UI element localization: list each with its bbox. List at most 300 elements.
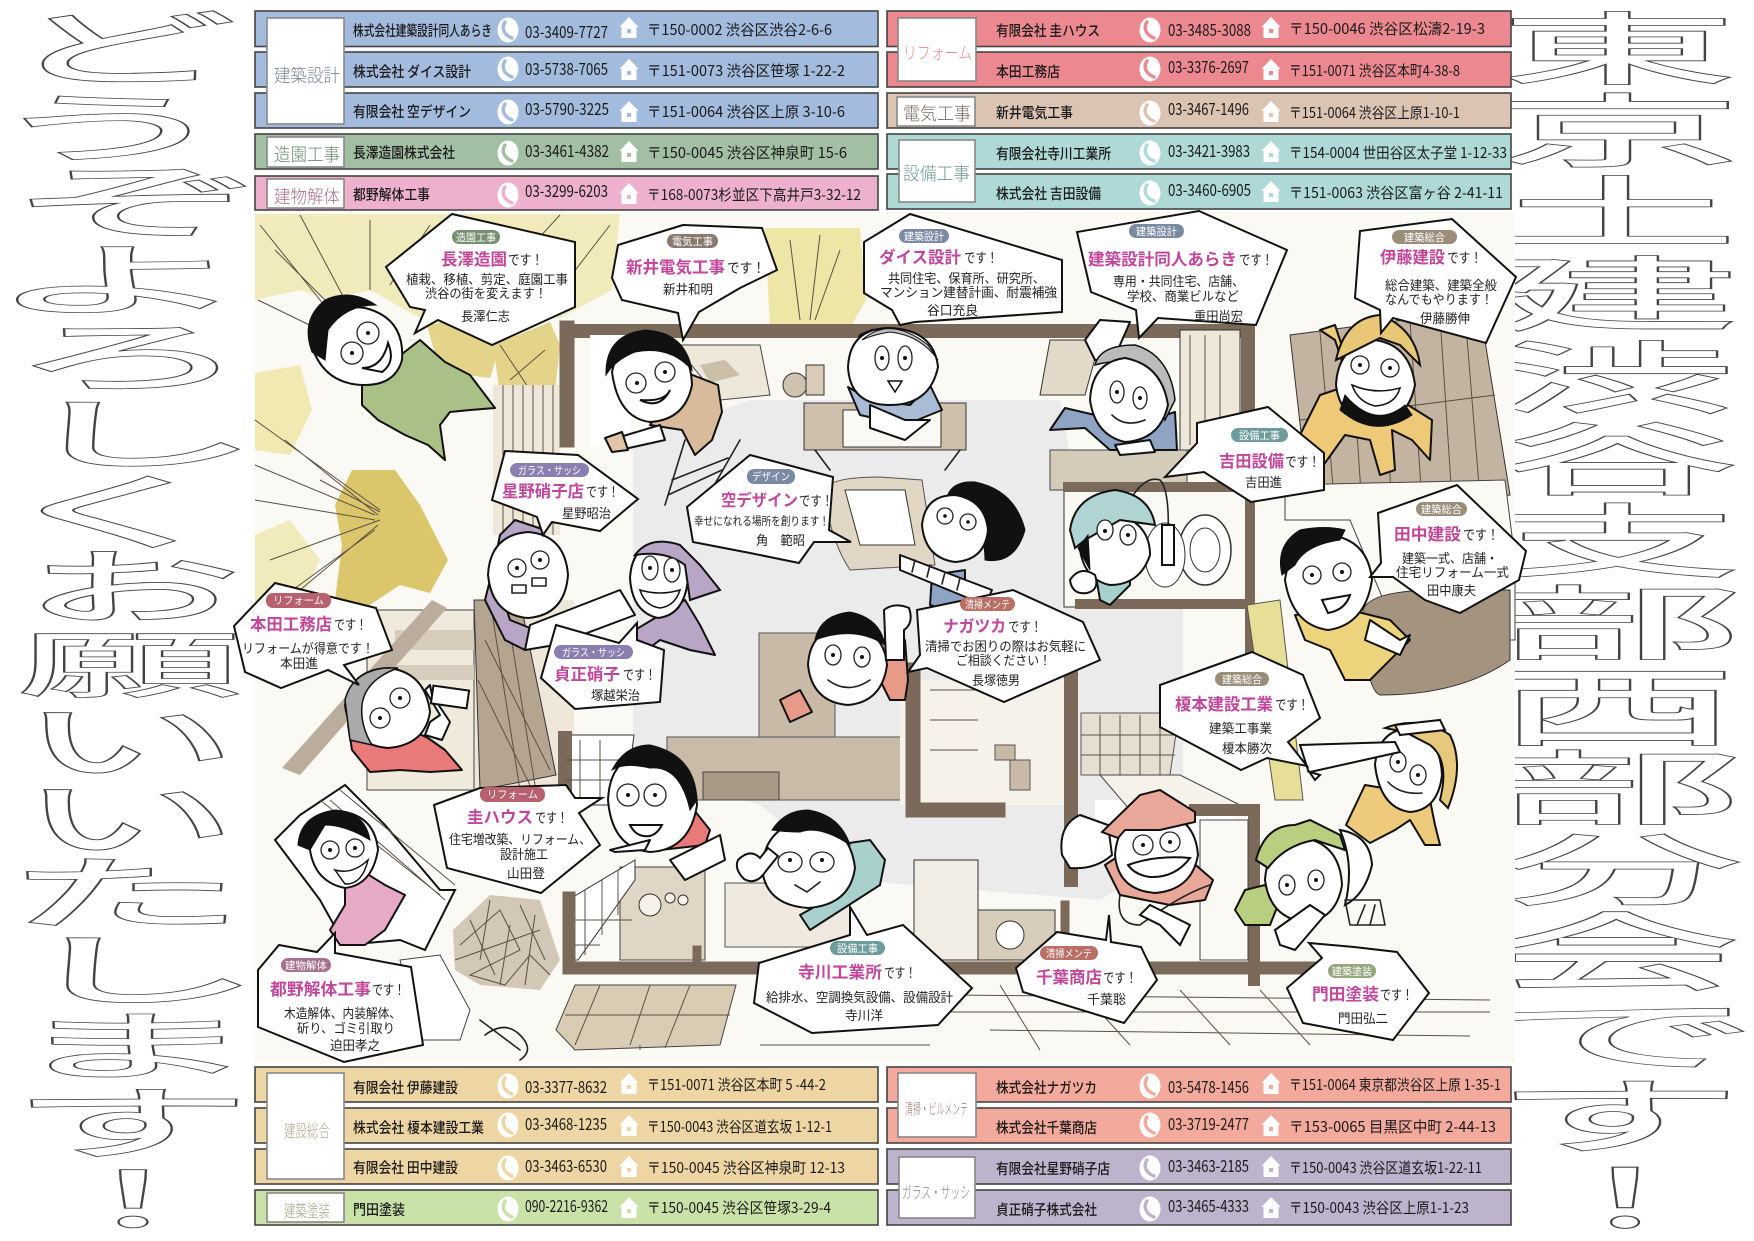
bubble text: 長澤仁志 (461, 306, 510, 325)
bubble text: マンション建替計画、耐震補強 (880, 282, 1057, 301)
row: 貞正硝子 (887, 1190, 1511, 1225)
bubble text: 榎本勝次 (1222, 738, 1272, 757)
bubble text: 伊藤勝伸 (1420, 308, 1470, 327)
heading: right vertical title: 谷 (1496, 396, 1740, 512)
bubble title: です！ (1275, 695, 1309, 715)
category box: 建物解体: 建物解体 (274, 183, 340, 209)
icon: phone (498, 1156, 518, 1180)
row: 空デザイン (255, 93, 878, 128)
character: 田中 (建設) (1280, 528, 1410, 680)
heading: left vertical message: く (0, 448, 240, 565)
icon: phone (498, 1074, 518, 1098)
company name: 株式会社千葉商店 (996, 1117, 1097, 1138)
tag: 造園工事: 造園工事 (456, 230, 496, 245)
icon: phone (1140, 56, 1160, 82)
icon: house (620, 1197, 638, 1218)
heading: left vertical message: お (23, 523, 243, 640)
speech bubble: 田中建設 (1370, 485, 1526, 613)
phone number: 03-3461-4382 (525, 138, 609, 162)
row: ナガツカ (887, 1067, 1511, 1102)
bubble title: です！ (1463, 525, 1499, 545)
phone number: 03-3467-1496 (1168, 96, 1249, 120)
bubble text (1113, 271, 1244, 325)
category box: ガラス・サッシ: ガラス・サッシ (902, 1179, 970, 1203)
icon: phone (1140, 1112, 1160, 1138)
heading: left vertical message: た (4, 831, 246, 945)
bubble title (1312, 981, 1413, 1005)
category box: 建築塗装: 建築塗装 (284, 1197, 330, 1222)
bubble text: 田中康夫 (1427, 580, 1476, 599)
heading: right vertical title: 部 (1493, 724, 1743, 841)
icon: house (620, 183, 638, 204)
bubble text: 門田弘二 (1338, 1008, 1388, 1027)
company name: 株式会社 ダイス設計 (353, 61, 471, 82)
icon: house (1262, 181, 1280, 202)
bubble text: 長塚徳男 (972, 670, 1020, 689)
bubble title: 貞正硝子 (554, 661, 620, 685)
character: 榎本 (建設工業) (1300, 720, 1457, 845)
category box: ガラス・サッシ (899, 1157, 975, 1218)
company name: 有限会社 伊藤建設 (353, 1077, 458, 1098)
company name: 貞正硝子株式会社 (996, 1199, 1097, 1220)
phone number: 03-3460-6905 (1168, 177, 1251, 201)
icon: phone (498, 1196, 518, 1222)
character: 吉田 (設備) (1070, 479, 1174, 605)
bubble text (1396, 548, 1509, 599)
bubble text: 山田登 (507, 863, 545, 882)
category box: 設備工事: 設備工事 (903, 160, 970, 186)
bubble text (284, 1003, 401, 1054)
heading: left vertical message: 願 (17, 608, 243, 712)
tag: リフォーム: リフォーム (487, 787, 538, 802)
address: 〒151-0064 渋谷区上原1-10-1 (1289, 102, 1460, 123)
speech bubble: 門田塗装 (1287, 943, 1429, 1040)
bubble text: なんでもやります！ (1385, 289, 1493, 308)
bubble text: 建築一式、店舗・ (1402, 548, 1498, 567)
bubble title: です！ (1447, 248, 1482, 268)
bubble text: 吉田進 (1245, 472, 1282, 491)
icon: house (620, 59, 638, 80)
company name: 有限会社 空デザイン (353, 101, 471, 122)
character: 寺川 (工業所) (737, 810, 885, 930)
bubble title: です！ (884, 963, 916, 983)
tag: 建築総合: 建築総合 (1222, 672, 1262, 687)
bubble title (467, 804, 568, 828)
bubble title: です！ (964, 248, 998, 268)
row: 千葉商店 (887, 1108, 1511, 1143)
phone number: 03-5478-1456 (1168, 1074, 1249, 1098)
bubble title: です！ (334, 615, 367, 635)
phone number: 03-3376-2697 (1168, 54, 1249, 78)
bubble title (554, 661, 656, 685)
phone number: 03-3485-3088 (1168, 17, 1251, 41)
character: 門田 (塗装) (1235, 820, 1385, 950)
phone number: 03-3719-2477 (1168, 1111, 1249, 1135)
bubble title: です！ (1380, 985, 1413, 1005)
icon: phone (498, 140, 518, 166)
speech bubble: 新井電気工事 (612, 225, 777, 340)
speech bubble: ナガツカ (908, 590, 1100, 702)
bubble text: 寺川洋 (845, 1005, 883, 1024)
bubble title: です！ (1008, 617, 1042, 637)
heading: left vertical message: い (19, 751, 237, 873)
tag: ガラス・サッシ: ガラス・サッシ (518, 463, 581, 478)
category box: 建築設計 (267, 18, 344, 124)
tag: 清掃メンテ: 清掃メンテ (1046, 946, 1092, 961)
phone number: 03-3421-3983 (1168, 138, 1250, 162)
bubble text (406, 269, 568, 325)
bubble text: 共同住宅、保育所、研究所、 (888, 268, 1045, 287)
bubble text: 星野昭治 (562, 503, 611, 522)
category box: 建築設計: 建築設計 (274, 62, 340, 88)
company name: 門田塗装 (353, 1199, 405, 1220)
bubble text: 渋谷の街を変えます！ (425, 283, 547, 302)
row: 榎本建設工業 (255, 1108, 878, 1143)
icon: phone (1140, 1196, 1160, 1222)
heading: right vertical title: す (1492, 1052, 1744, 1169)
company name: 長澤造園株式会社 (353, 142, 455, 163)
bubble text: 新井和明 (663, 279, 713, 298)
speech bubble: 長澤造園 (386, 214, 575, 345)
character: 千葉 (清掃) (1061, 790, 1213, 945)
icon: house (620, 1073, 638, 1094)
heading: left vertical message: し (9, 910, 265, 1021)
row: 本田工務店 (887, 52, 1511, 87)
character: 本田 (工務店) (345, 668, 469, 772)
address: 〒154-0004 世田谷区太子堂 1-12-33 (1289, 142, 1507, 163)
row: 建築設計同人あらき (255, 11, 878, 46)
speech bubble: ダイス設計 (864, 214, 1062, 325)
character: 重田 (あらき) (1050, 320, 1177, 455)
row: 伊藤建設 (255, 1067, 878, 1102)
company name: 新井電気工事 (996, 102, 1073, 123)
bubble title: です！ (508, 250, 543, 270)
speech bubble: 貞正硝子 (541, 623, 664, 709)
character: 山田 (圭ハウス) (608, 745, 725, 880)
tag: 建築総合: 建築総合 (1421, 502, 1462, 517)
character: 新井 (電気) (605, 330, 740, 510)
icon: phone (498, 100, 518, 124)
bubble title: です！ (372, 980, 405, 1000)
bubble title (1036, 964, 1137, 988)
phone number: 03-3465-4333 (1168, 1193, 1249, 1217)
heading: right vertical title: 土 (1493, 152, 1739, 263)
company name: 本田工務店 (996, 61, 1060, 82)
heading: right vertical title (1477, 0, 1754, 1241)
bubble text (925, 636, 1086, 689)
bubble title: 長澤造園 (441, 246, 507, 270)
address: 〒151-0071 渋谷区本町4-38-8 (1289, 60, 1460, 81)
speech bubble: 星野硝子店 (492, 451, 638, 535)
bubble text: 清掃でお困りの際はお気軽に (925, 636, 1086, 655)
company name: 有限会社 圭ハウス (996, 20, 1100, 41)
heading: left vertical message (0, 0, 266, 1241)
icon: house (620, 101, 638, 122)
speech bubble: 圭ハウス (434, 785, 602, 893)
bubble text: 本田進 (280, 653, 318, 672)
icon: house (620, 17, 638, 38)
bubble text: 斫り、ゴミ引取り (297, 1018, 395, 1037)
row: 門田塗装 (255, 1190, 878, 1225)
character: 塚越 (ガラス) (630, 542, 720, 655)
address: 〒151-0063 渋谷区富ヶ谷 2-41-11 (1289, 182, 1503, 203)
icon: phone (1140, 18, 1160, 42)
tag: 建築塗装: 建築塗装 (1332, 964, 1372, 979)
speech bubble: 伊藤建設 (1355, 219, 1516, 343)
heading: right vertical title: 支 (1493, 478, 1743, 594)
icon: house (620, 141, 638, 162)
bubble title: 空デザイン (721, 487, 798, 511)
speech bubble: 榎本建設工業 (1160, 652, 1320, 770)
heading: right vertical title: 西 (1496, 639, 1738, 764)
illustration: house background (255, 212, 1515, 1063)
phone number: 090-2216-9362 (525, 1193, 608, 1217)
address: 〒150-0043 渋谷区道玄坂1-22-11 (1289, 1157, 1482, 1178)
category box: 建築塗装 (267, 1193, 344, 1222)
bubble title: 本田工務店 (250, 611, 332, 635)
row: 長澤造園 (255, 134, 878, 169)
heading: left vertical message: ぞ (14, 139, 266, 255)
category box: リフォーム (898, 18, 976, 81)
bubble text: リフォームが得意です！ (242, 638, 374, 657)
heading: left vertical message: ろ (10, 297, 250, 407)
address: 〒150-0002 渋谷区渋谷2-6-6 (647, 19, 832, 40)
phone number: 03-3299-6203 (525, 178, 608, 202)
icon: house (1262, 59, 1280, 80)
row: 吉田設備 (887, 174, 1511, 209)
tag: 設備工事: 設備工事 (837, 941, 878, 956)
bubble text (880, 268, 1057, 319)
character: 角 (空デザイン) (900, 482, 1025, 610)
icon: phone (498, 1112, 518, 1138)
address: 〒151-0073 渋谷区笹塚 1-22-2 (647, 60, 845, 81)
icon: house (1262, 141, 1280, 162)
company name: 株式会社 吉田設備 (996, 183, 1101, 204)
speech bubble: 千葉商店 (1016, 915, 1157, 1023)
address: 〒150-0045 渋谷区神泉町 15-6 (647, 142, 847, 163)
address: 〒151-0064 東京都渋谷区上原 1-35-1 (1289, 1074, 1501, 1095)
bubble title: 千葉商店 (1036, 964, 1102, 988)
phone number: 03-3463-2185 (1168, 1153, 1249, 1177)
row: 寺川工業所 (887, 134, 1511, 169)
icon: phone (498, 18, 518, 42)
phone number: 03-5738-7065 (525, 56, 608, 80)
tag: 建築設計: 建築設計 (1136, 224, 1177, 239)
category box: 電気工事: 電気工事 (903, 100, 971, 126)
tag: 建築設計: 建築設計 (904, 229, 944, 244)
speech bubble: 本田工務店 (234, 583, 392, 688)
tag: 電気工事: 電気工事 (672, 234, 713, 249)
phone number: 03-3377-8632 (525, 1074, 607, 1098)
bubble title: です！ (1239, 250, 1273, 270)
speech bubble: 吉田設備 (1165, 407, 1324, 502)
bubble text: 迫田孝之 (330, 1035, 380, 1054)
icon: house (620, 1156, 638, 1177)
bubble title: です！ (1285, 452, 1320, 472)
bubble text: 植栽、移植、剪定、庭園工事 (406, 269, 568, 288)
bubble text: 角 範昭 (756, 530, 805, 549)
bubble text: ご相談ください！ (956, 650, 1051, 669)
bubble title (1380, 244, 1482, 268)
bubble title: 榎本建設工業 (1175, 691, 1273, 715)
category box: リフォーム: リフォーム (903, 39, 972, 64)
bubble text: 設計施工 (500, 844, 548, 863)
icon: phone (498, 56, 518, 82)
heading: right vertical title: 会 (1493, 885, 1741, 1008)
bubble text: 建築工事業 (1209, 718, 1272, 737)
bubble title: ナガツカ (943, 613, 1006, 637)
row: 圭ハウス (887, 11, 1511, 46)
category box: 清掃・ビルメンテ (898, 1073, 976, 1137)
address: 〒150-0043 渋谷区道玄坂 1-12-1 (647, 1116, 832, 1137)
bubble text (242, 638, 374, 672)
address: 〒150-0043 渋谷区上原1-1-23 (1289, 1197, 1469, 1218)
speech bubble: 都野解体工事 (258, 933, 423, 1062)
bubble title: 伊藤建設 (1380, 244, 1445, 268)
bubble title: です！ (623, 665, 656, 685)
category box: 設備工事 (899, 140, 975, 202)
icon: phone (1140, 1074, 1160, 1098)
bubble title (879, 244, 998, 268)
bubble title: ダイス設計 (879, 244, 961, 268)
category box: 建設総合: 建設総合 (284, 1117, 330, 1142)
character: 星野 (ガラス) (485, 520, 635, 650)
heading: right vertical title: 分 (1494, 809, 1744, 921)
bubble text: 住宅増改築、リフォーム、 (449, 829, 591, 848)
icon: phone (498, 182, 518, 208)
bubble text (694, 513, 829, 549)
phone number: 03-3468-1235 (525, 1111, 607, 1135)
bubble title (798, 959, 916, 983)
icon: house (1262, 1197, 1280, 1218)
bubble title: 建築設計同人あらき (1088, 246, 1237, 270)
address: 〒150-0045 渋谷区神泉町 12-13 (647, 1157, 845, 1178)
bubble title: 圭ハウス (467, 804, 533, 828)
address: 〒150-0046 渋谷区松濤2-19-3 (1289, 18, 1485, 39)
bubble title: です！ (1103, 968, 1137, 988)
tag: 建築総合 (1392, 230, 1457, 245)
bubble title (943, 613, 1042, 637)
company name: 有限会社 田中建設 (353, 1157, 458, 1178)
icon: house (1262, 1073, 1280, 1094)
bubble text: 幸せになれる場所を創ります！ (694, 513, 829, 529)
character: 伊藤 (建設) (1300, 315, 1432, 475)
address: 〒153-0065 目黒区中町 2-44-13 (1289, 1116, 1496, 1137)
heading: right vertical title: 渋 (1493, 315, 1735, 430)
bubble text: 塚越栄治 (591, 685, 640, 704)
category box: 造園工事: 造園工事 (274, 141, 340, 167)
speech bubble: 空デザイン (687, 455, 851, 563)
tag: 建築総合: 建築総合 (1404, 230, 1445, 245)
bubble title: です！ (535, 808, 568, 828)
bubble text: 木造解体、内装解体、 (284, 1003, 401, 1022)
tag: 清掃メンテ: 清掃メンテ (965, 597, 1010, 612)
icon: house (1262, 17, 1280, 38)
row: 都野解体工事 (255, 176, 878, 210)
character: 長澤 (造園) (308, 295, 495, 460)
icon: house (1262, 101, 1280, 122)
icon: phone (1140, 1156, 1160, 1180)
company name: 株式会社ナガツカ (996, 1077, 1097, 1098)
bubble title: です！ (799, 491, 833, 511)
icon: phone (1140, 180, 1160, 206)
phone number: 03-3463-6530 (525, 1153, 607, 1177)
bubble title: 田中建設 (1394, 521, 1462, 545)
tag: デザイン: デザイン (752, 469, 790, 484)
company name: 株式会社 榎本建設工業 (353, 1117, 484, 1138)
bubble text (1209, 718, 1272, 757)
speech bubble: 建築設計同人あらき (1077, 211, 1287, 338)
bubble text (1385, 275, 1497, 327)
company name: 都野解体工事 (353, 184, 430, 205)
heading: left vertical message: し (10, 374, 262, 484)
company name: 有限会社星野硝子店 (996, 1158, 1110, 1179)
row: 新井電気工事 (887, 93, 1511, 128)
bubble text: 給排水、空調換気設備、設備設計 (766, 987, 953, 1006)
bubble text: 専用・共同住宅、店舗、 (1113, 271, 1244, 290)
address: 〒151-0071 渋谷区本町 5 -44-2 (647, 1074, 826, 1095)
bubble text: 住宅リフォーム一式 (1396, 562, 1509, 581)
bubble title (1394, 521, 1499, 545)
tag: 建物解体: 建物解体 (285, 958, 327, 973)
heading: right vertical title: 部 (1493, 559, 1743, 676)
character: 長塚 (ナガツカ) (780, 605, 911, 722)
address: 〒150-0045 渋谷区笹塚3-29-4 (647, 1197, 831, 1218)
icon: house (620, 1115, 638, 1136)
tag: 設備工事: 設備工事 (1239, 428, 1280, 443)
heading: right vertical title: 建 (1494, 229, 1738, 348)
icon: house (1262, 1115, 1280, 1136)
bubble text: 谷口充良 (927, 300, 978, 319)
heading: right vertical title: 京 (1493, 68, 1743, 184)
phone number: 03-3409-7727 (525, 19, 608, 43)
bubble text: 千葉聡 (1087, 989, 1126, 1008)
bubble title: です！ (727, 258, 765, 278)
icon: phone (1140, 140, 1160, 166)
row: 星野硝子店 (887, 1149, 1511, 1184)
tag: リフォーム: リフォーム (273, 593, 324, 608)
bubble text: 重田尚宏 (1194, 306, 1243, 325)
bubble text: 学校、商業ビルなど (1127, 286, 1239, 305)
phone number: 03-5790-3225 (525, 96, 609, 120)
row: ダイス設計 (255, 52, 878, 87)
bubble text: 総合建築、建築全般 (1385, 275, 1497, 294)
heading: left vertical message: ま (6, 987, 260, 1094)
character: 迫田 (都野解体) (275, 785, 455, 950)
speech bubble: 寺川工業所 (754, 907, 972, 1033)
bubble title: 都野解体工事 (270, 976, 371, 1000)
bubble title: 新井電気工事 (626, 254, 725, 278)
bubble title: です！ (586, 482, 619, 502)
bubble title (441, 246, 543, 270)
address: 〒168-0073杉並区下高井戸3-32-12 (647, 184, 861, 205)
bubble title (1219, 448, 1320, 472)
icon: house (1262, 1156, 1280, 1177)
heading: left vertical message: す (9, 1062, 253, 1174)
bubble title: 門田塗装 (1312, 981, 1380, 1005)
company name: 株式会社建築設計同人あらき (353, 20, 492, 41)
company name: 有限会社寺川工業所 (996, 143, 1111, 164)
heading: left vertical message: い (19, 674, 237, 796)
tag: ガラス・サッシ: ガラス・サッシ (562, 645, 625, 660)
bubble text (766, 987, 953, 1024)
bubble title: 寺川工業所 (798, 959, 883, 983)
row: 田中建設 (255, 1149, 878, 1184)
bubble title: 吉田設備 (1219, 448, 1284, 472)
character: 谷口 (ダイス設計) (848, 328, 942, 440)
category box: 建設総合 (267, 1073, 344, 1179)
bubble text (449, 829, 591, 882)
